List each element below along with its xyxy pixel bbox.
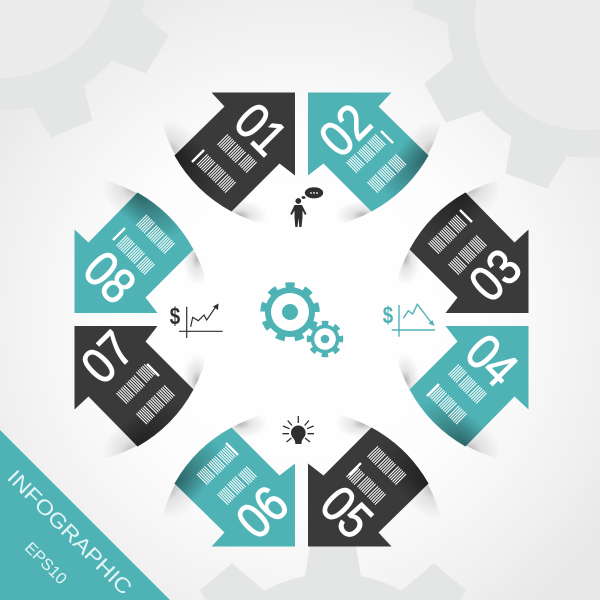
icon: light bulb (282, 416, 314, 444)
icon: central gears (259, 281, 344, 358)
corner banner (0, 430, 170, 600)
arrow 05 (308, 428, 428, 549)
arrow 06: 06 (225, 475, 299, 549)
arrow 02: 02 (308, 93, 382, 167)
banner title: INFOGRAPHIC (2, 466, 136, 600)
gear: top-right background (413, 0, 600, 189)
banner subtitle: EPS10 (21, 539, 70, 588)
icon: falling dollar chart: $ (383, 301, 393, 329)
arrow 06 (174, 428, 299, 549)
arrow 07 (70, 320, 194, 446)
arrow 03 (410, 192, 532, 313)
arrow 07: 07 (70, 320, 144, 394)
icon: rising dollar chart (170, 302, 223, 338)
petal shadows (102, 120, 500, 518)
arrow 08 (73, 192, 194, 314)
arrow 02 (308, 92, 428, 212)
gear: bottom background (200, 534, 466, 600)
arrow 04: 04 (455, 323, 529, 397)
icon: person with speech bubble (290, 187, 323, 227)
icon: falling dollar chart (383, 301, 435, 337)
arrow 04 (410, 323, 529, 446)
icon: rising dollar chart: $ (170, 302, 180, 330)
arrow 05: 05 (310, 475, 384, 549)
arrow 08: 08 (73, 240, 147, 314)
arrow 01 (174, 92, 298, 212)
gear: top-left background (36, 16, 168, 137)
arrow 03: 03 (458, 238, 532, 312)
arrow 01: 01 (224, 92, 298, 166)
